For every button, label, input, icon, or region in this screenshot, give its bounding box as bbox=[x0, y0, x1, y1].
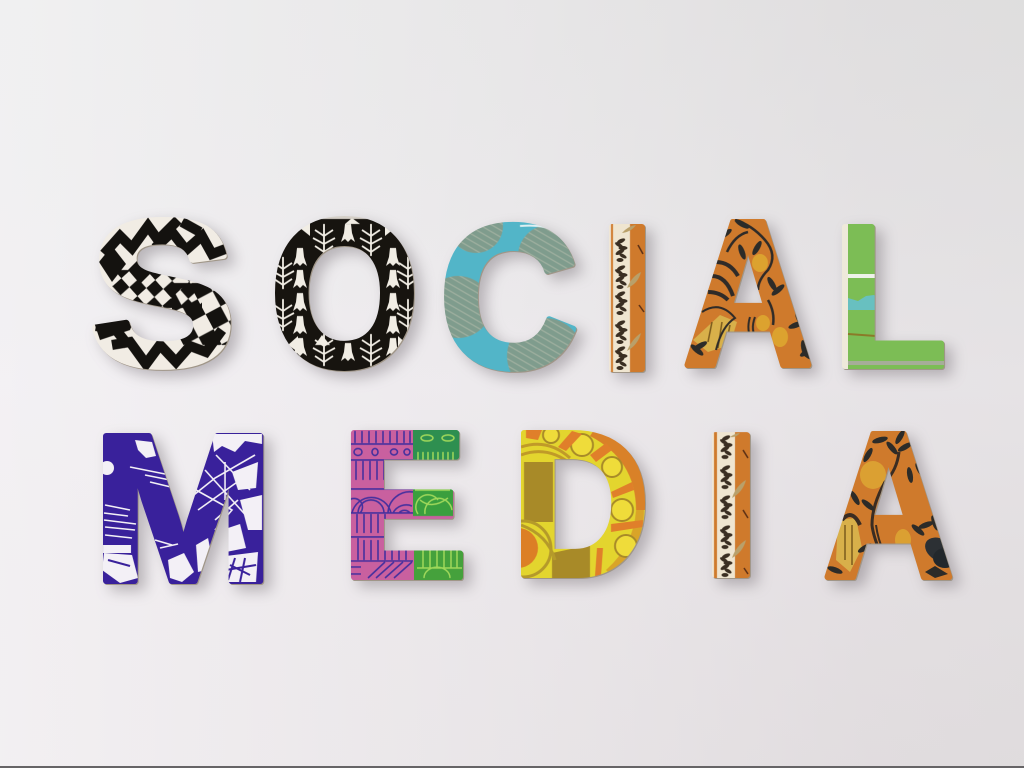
letter A: orange botanical print: A bbox=[823, 390, 954, 623]
letter C: turquoise with grey-green circles: C bbox=[439, 184, 579, 412]
letter O: black with white bells and leaves: O bbox=[270, 177, 419, 412]
letter E: pink and green line pattern: E bbox=[341, 389, 468, 623]
letter D: yellow, olive and orange retro pattern: D bbox=[511, 389, 650, 620]
letter A: orange botanical print: A bbox=[683, 178, 813, 411]
heading line: SOCIAL bbox=[89, 177, 947, 414]
letter L: green with blue band: L bbox=[832, 184, 947, 410]
letter I: orange with cream floral strip: I bbox=[598, 183, 656, 414]
letter I: orange with cream floral strip: I bbox=[701, 392, 761, 620]
letter S: black and white zigzag: S bbox=[89, 178, 236, 410]
heading line: MEDIA bbox=[92, 389, 954, 627]
letter M: blue and white toile: M bbox=[92, 392, 275, 627]
